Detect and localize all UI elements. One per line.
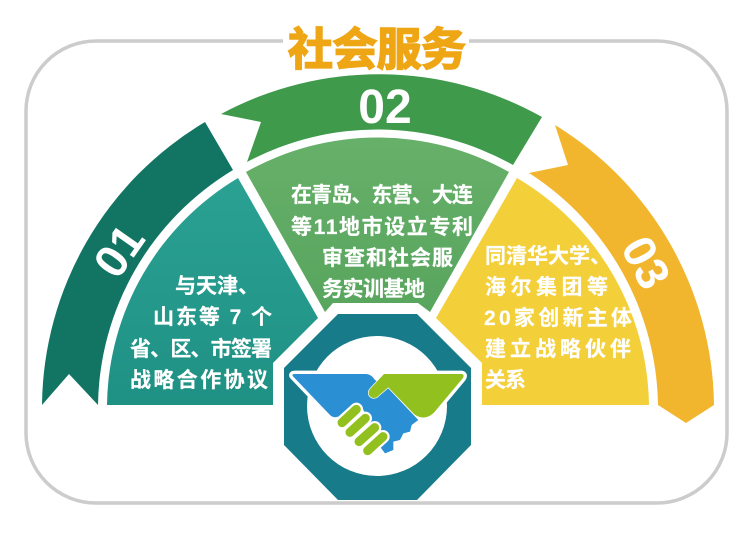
panel text 03: 海 尔 集 团 等 [485,276,608,299]
teal panel [107,178,318,405]
title: 社会服务 [288,24,466,75]
icon: handshake [292,374,464,453]
panel text 01: 战略合作协议 [130,369,268,392]
panel 03: innovation partners [436,125,714,423]
arrow band 01 [42,122,233,405]
panel text 02: 等11地市设立专利 [291,215,473,239]
panel text 03: 20家创新主体 [484,306,632,330]
white circle [307,336,447,476]
panel 02: examination and service bases [221,74,542,312]
arrow band 03 [529,125,714,423]
green panel [246,138,509,312]
panel text 02: 在青岛、东营、大连 [291,183,473,207]
octagon badge [284,314,471,500]
number 03: 03 [611,228,681,297]
panel text 01: 与天津、 [175,275,259,298]
number 01: 01 [83,215,155,287]
panel text 01: 省、区、市签署 [130,337,272,361]
panel text 03 [484,244,632,392]
panel text 01: 山东等 7 个 [153,305,272,329]
panel text 02: 审查和社会服 [322,246,453,270]
panel text 02 [291,183,473,301]
panel text 03: 关系 [485,369,526,392]
number 02: 02 [358,81,412,134]
panel text 02: 务实训基地 [322,277,425,301]
yellow panel [436,178,649,405]
panel text 01 [130,275,272,392]
panel text 03: 建立战略伙伴 [485,337,631,361]
panel text 03: 同清华大学、 [485,244,611,268]
panel 01: provincial agreements [42,122,318,405]
handshake emblem [284,314,471,500]
arrow band 02 [221,74,542,165]
